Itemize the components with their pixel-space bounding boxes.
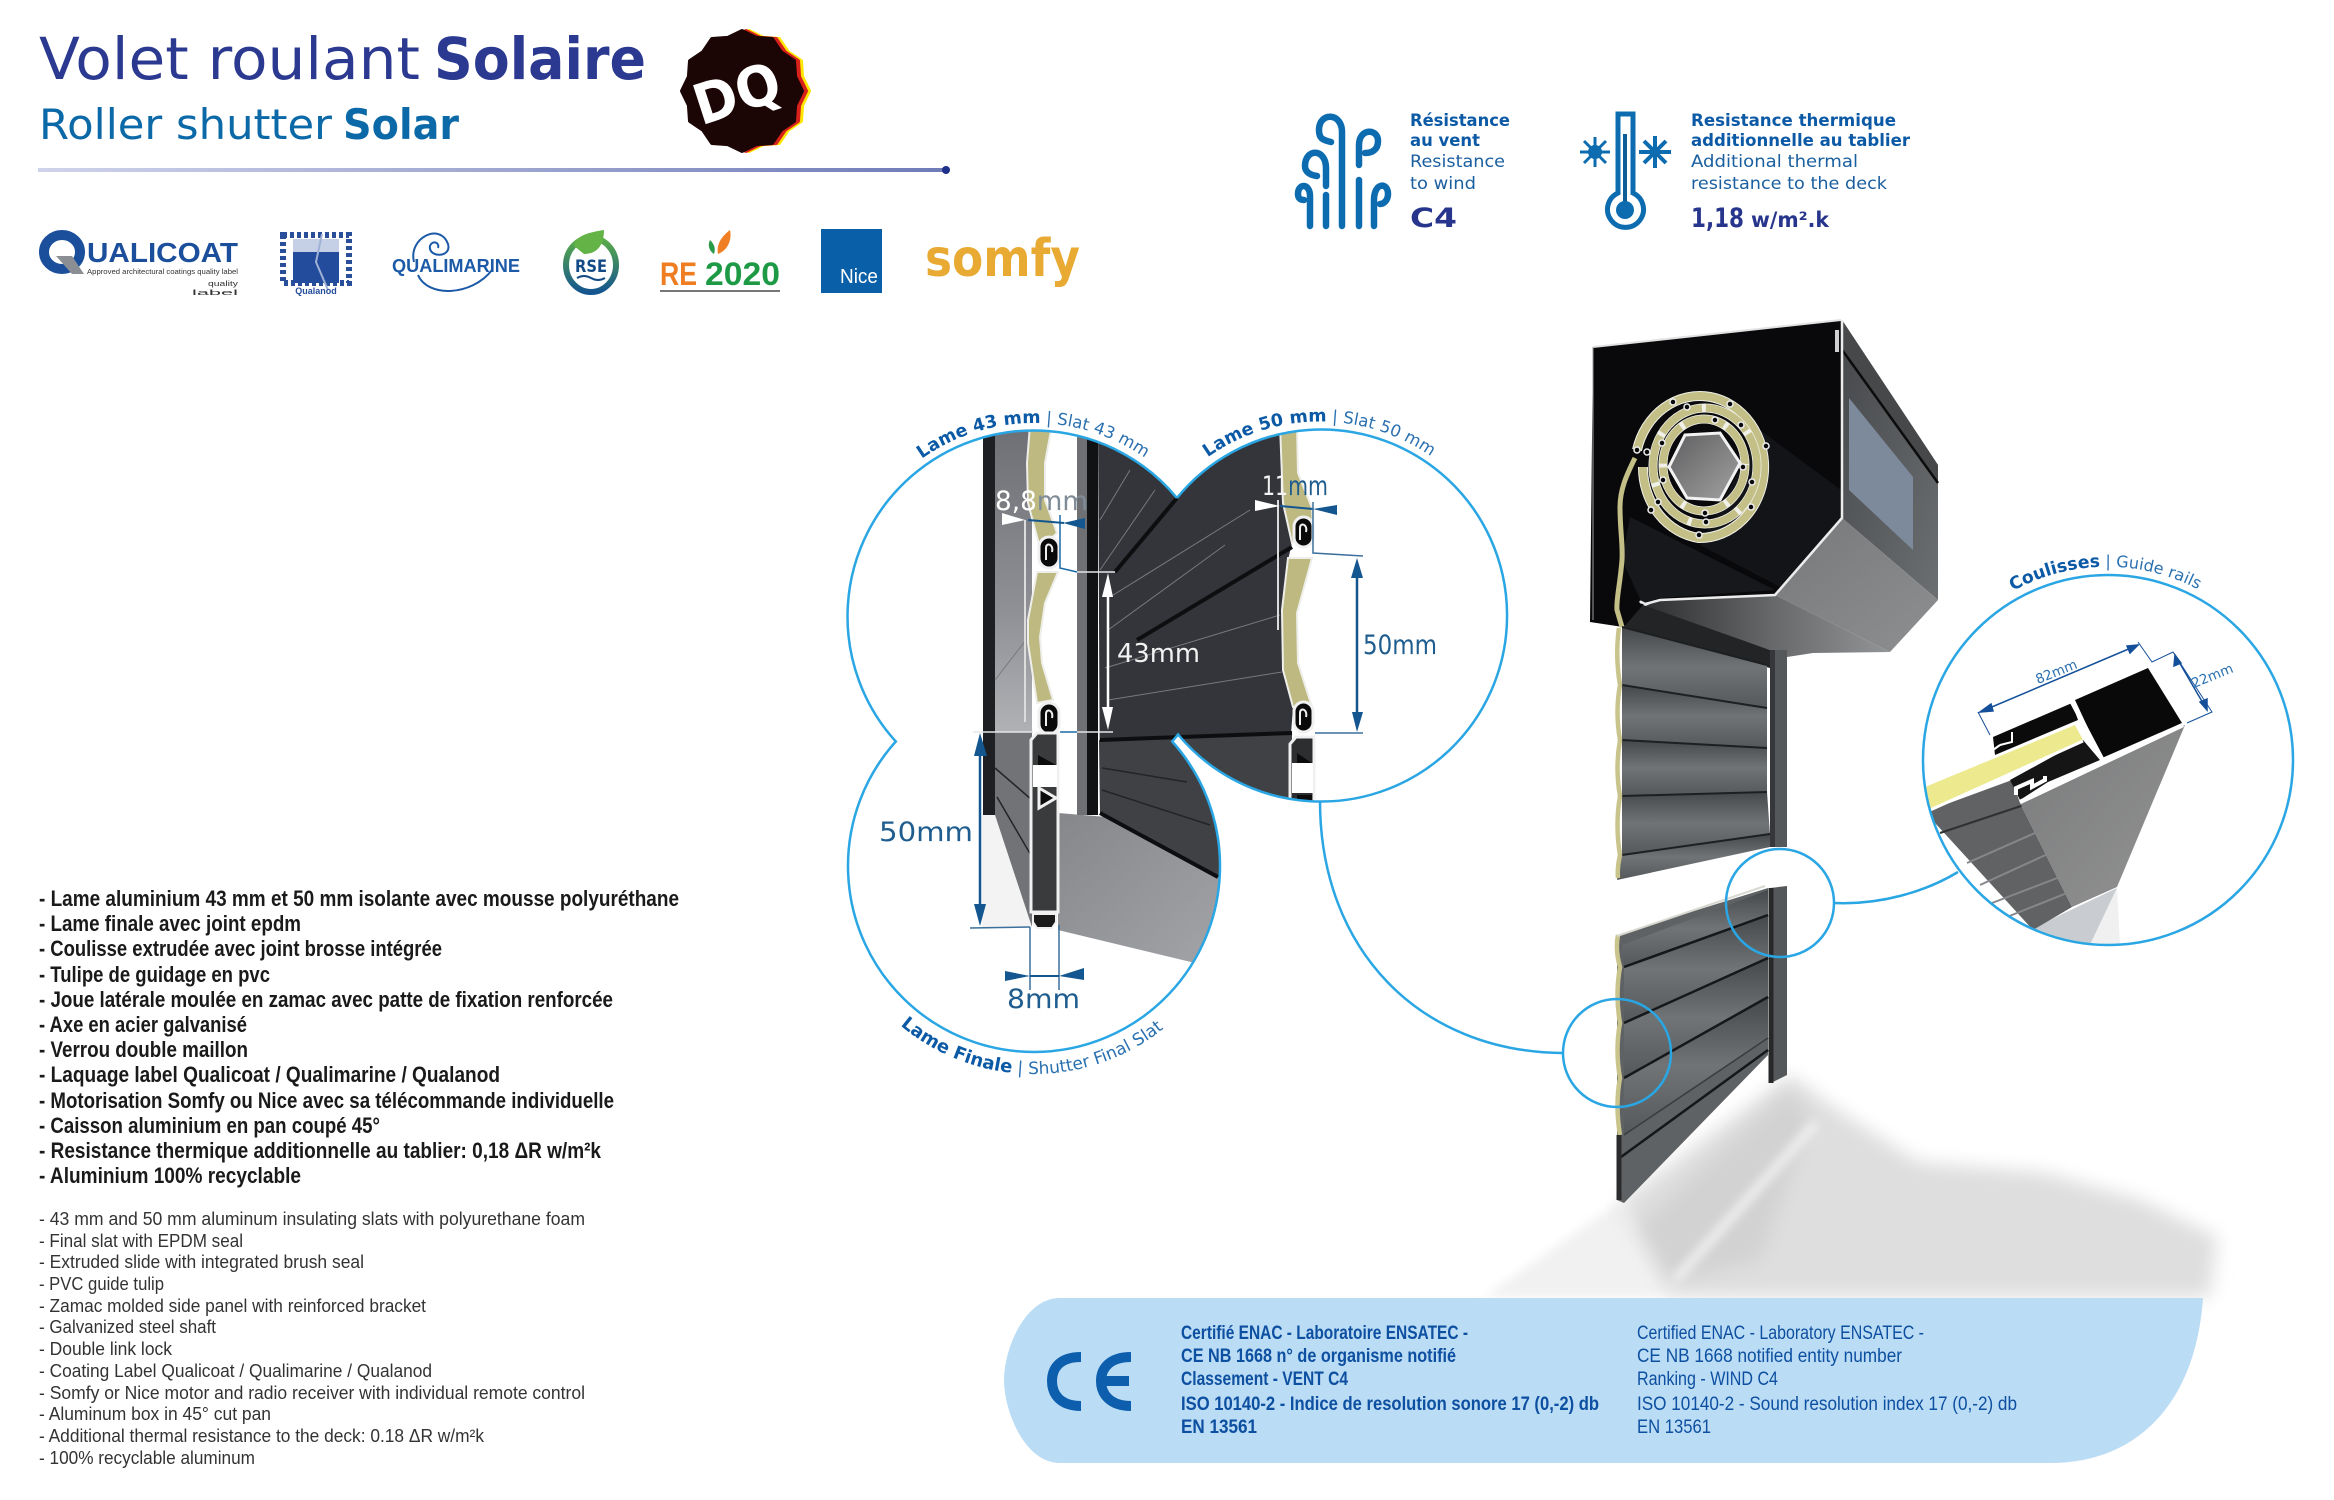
dimension 50mm slat (1351, 558, 1437, 732)
dimension: rail width: 22mm (2189, 661, 2236, 692)
English feature list: - Extruded slide with integrated brush seal (39, 1252, 364, 1272)
panel: CE certification: CE NB 1668 n° de organisme notifié (1181, 1346, 1456, 1367)
French feature list: - Lame aluminium 43 mm et 50 mm isolante avec mousse polyuréthane (39, 886, 679, 911)
icon: thermometer (1580, 114, 1671, 227)
callout: slat locator (1320, 801, 1671, 1107)
panel: slat detail circles (846, 410, 1508, 1078)
upper shutter curtain (1617, 627, 1787, 880)
title: Solaire (434, 25, 646, 93)
dimension 11mm (1255, 471, 1363, 733)
thermal resistance text: additionnelle au tablier (1691, 131, 1911, 151)
logo: Qualanod: Qualanod (295, 286, 337, 296)
panel: CE certification: Certifié ENAC - Laboratoire ENSATEC - (1181, 1323, 1468, 1344)
dimension 8mm (1005, 925, 1084, 1015)
French feature list (39, 886, 679, 1188)
logo: RE 2020: 2020 (705, 256, 780, 292)
wind resistance text: to wind (1410, 174, 1476, 194)
wind resistance text: Résistance (1410, 111, 1510, 131)
English feature list: - PVC guide tulip (39, 1274, 164, 1294)
logo: Qualicoat: Approved architectural coatings quality label (87, 269, 238, 276)
logo: RE 2020: RE (660, 256, 697, 292)
DQ badge: DQ (685, 50, 789, 139)
dimension 8,8mm: 8,8mm (995, 486, 1088, 517)
panel: guide rails detail (1922, 554, 2294, 946)
rail floor (2033, 888, 2117, 945)
logo: RSE (566, 230, 616, 292)
thermal resistance text: 1,18 (1691, 203, 1744, 234)
French feature list: - Lame finale avec joint epdm (39, 911, 301, 936)
logo: Qualicoat (44, 235, 239, 297)
title: Solar (343, 100, 459, 149)
dimension: rail width (1978, 642, 2236, 735)
dark slat panel (1098, 420, 1293, 890)
title rule (38, 166, 950, 174)
wind resistance text: Resistance (1410, 152, 1505, 172)
logo: Qualanod (283, 234, 349, 296)
dimension 43mm (1102, 573, 1200, 730)
thermal resistance text: w/m².k (1751, 208, 1830, 232)
logo: Qualimarine (392, 234, 520, 291)
dimension 8,8mm (973, 486, 1115, 732)
wind resistance text (1410, 111, 1510, 234)
curved label: slat 43: Lame 43 mm | Slat 43 mm (916, 411, 1148, 458)
slat profiles (1027, 425, 1313, 707)
French feature list: - Joue latérale moulée en zamac avec patte de fixation renforcée (39, 987, 613, 1012)
box grille (1849, 398, 1913, 550)
box chamfer (1775, 518, 1938, 652)
logo: Nice (821, 229, 882, 293)
French feature list: - Motorisation Somfy ou Nice avec sa télécommande individuelle (39, 1088, 614, 1113)
logo: Qualicoat: UALICOAT (87, 237, 238, 268)
French feature list: - Axe en acier galvanisé (39, 1012, 247, 1037)
panel: CE certification: Classement - VENT C4 (1181, 1369, 1348, 1390)
panel: CE certification (1004, 1298, 2203, 1463)
panel: CE certification: ISO 10140-2 - Indice de resolution sonore 17 (0,-2) db (1181, 1394, 1599, 1415)
French feature list: - Laquage label Qualicoat / Qualimarine / Qualanod (39, 1062, 500, 1087)
lower shutter curtain (1617, 886, 1787, 1203)
title: Volet roulant (39, 25, 420, 93)
English feature list (39, 1209, 585, 1468)
curved label: guide rails: Coulisses | Guide rails (2010, 554, 2201, 588)
final slat (1031, 733, 1058, 912)
logo: Qualicoat: quality (208, 281, 239, 288)
callout: rail locator (1726, 849, 1958, 957)
English feature list: - Final slat with EPDM seal (39, 1231, 243, 1251)
gray face (2020, 725, 2185, 907)
slats (1925, 780, 2072, 930)
thermal resistance text: Additional thermal (1691, 152, 1858, 172)
icon: wind (1298, 117, 1388, 226)
panel: CE certification: EN 13561 (1637, 1417, 1711, 1438)
black profile (2075, 668, 2182, 758)
title: Roller shutter (39, 100, 333, 149)
English feature list: - 43 mm and 50 mm aluminum insulating slats with polyurethane foam (39, 1209, 585, 1229)
dimension: rail width: 82mm (2033, 657, 2080, 688)
logo: RE 2020 (660, 230, 780, 292)
box black face (1590, 320, 1841, 665)
panel: CE certification: ISO 10140-2 - Sound resolution index 17 (0,-2) db (1637, 1394, 2017, 1415)
thermal resistance text: Resistance thermique (1691, 111, 1896, 131)
thermal resistance text (1691, 111, 1911, 234)
logo: RSE: RSE (575, 257, 607, 277)
DQ badge (682, 31, 809, 151)
slat hooks (1039, 517, 1313, 734)
foam (1925, 725, 2083, 810)
box bottom (1643, 595, 1890, 657)
panel: CE certification: CE NB 1668 notified entity number (1637, 1346, 1903, 1367)
dimension 8mm: 8mm (1007, 984, 1080, 1015)
circle outlines (848, 430, 1507, 1052)
English feature list: - 100% recyclable aluminum (39, 1448, 255, 1468)
logo: somfy: somfy (925, 229, 1080, 289)
panel: CE certification: Ranking - WIND C4 (1637, 1369, 1778, 1390)
box side (1842, 320, 1938, 600)
English feature list: - Aluminum box in 45° cut pan (39, 1404, 271, 1424)
dimension 11mm: 11mm (1262, 471, 1328, 502)
English feature list: - Zamac molded side panel with reinforced bracket (39, 1296, 426, 1316)
wind resistance text: au vent (1410, 131, 1480, 151)
logo: Nice: Nice (840, 266, 878, 288)
panel folds (1100, 498, 1292, 877)
icon: CE mark (1052, 1357, 1131, 1406)
French feature list: - Resistance thermique additionnelle au tablier: 0,18 ΔR w/m²k (39, 1138, 602, 1163)
dimension 50mm slat: 50mm (1363, 630, 1437, 661)
French feature list: - Caisson aluminium en pan coupé 45° (39, 1113, 380, 1138)
profile walls (2020, 702, 2183, 802)
logo: Qualimarine: QUALIMARINE (392, 256, 520, 276)
floor shadow (1484, 1075, 2217, 1297)
French feature list: - Tulipe de guidage en pvc (39, 962, 270, 987)
shutter box (1590, 320, 1938, 668)
dimension 50mm final slat: 50mm (879, 817, 973, 848)
floor right (1058, 813, 1225, 963)
panel: CE certification: EN 13561 (1181, 1417, 1257, 1438)
dimension 50mm final slat (879, 733, 1030, 928)
English feature list: - Double link lock (39, 1339, 173, 1359)
curved label: slat 50: Lame 50 mm | Slat 50 mm (1202, 410, 1434, 456)
slat roll (1617, 396, 1764, 627)
title (39, 25, 646, 149)
dimension 43mm: 43mm (1117, 639, 1200, 669)
wind resistance text: C4 (1410, 203, 1457, 234)
English feature list: - Additional thermal resistance to the deck: 0.18 ΔR w/m²k (39, 1426, 485, 1446)
English feature list: - Coating Label Qualicoat / Qualimarine / Qualanod (39, 1361, 432, 1381)
French feature list: - Coulisse extrudée avec joint brosse intégrée (39, 936, 442, 961)
floor left (982, 815, 1032, 927)
curved label: final slat: Lame Finale | Shutter Final Slat (902, 1016, 1164, 1078)
English feature list: - Galvanized steel shaft (39, 1317, 216, 1337)
English feature list: - Somfy or Nice motor and radio receiver with individual remote control (39, 1383, 585, 1403)
French feature list: - Aluminium 100% recyclable (39, 1163, 301, 1188)
thermal resistance text: resistance to the deck (1691, 174, 1887, 194)
panel: CE certification: Certified ENAC - Laboratory ENSATEC - (1637, 1323, 1924, 1344)
logo: Qualicoat: label (192, 290, 239, 297)
French feature list: - Verrou double maillon (39, 1037, 248, 1062)
